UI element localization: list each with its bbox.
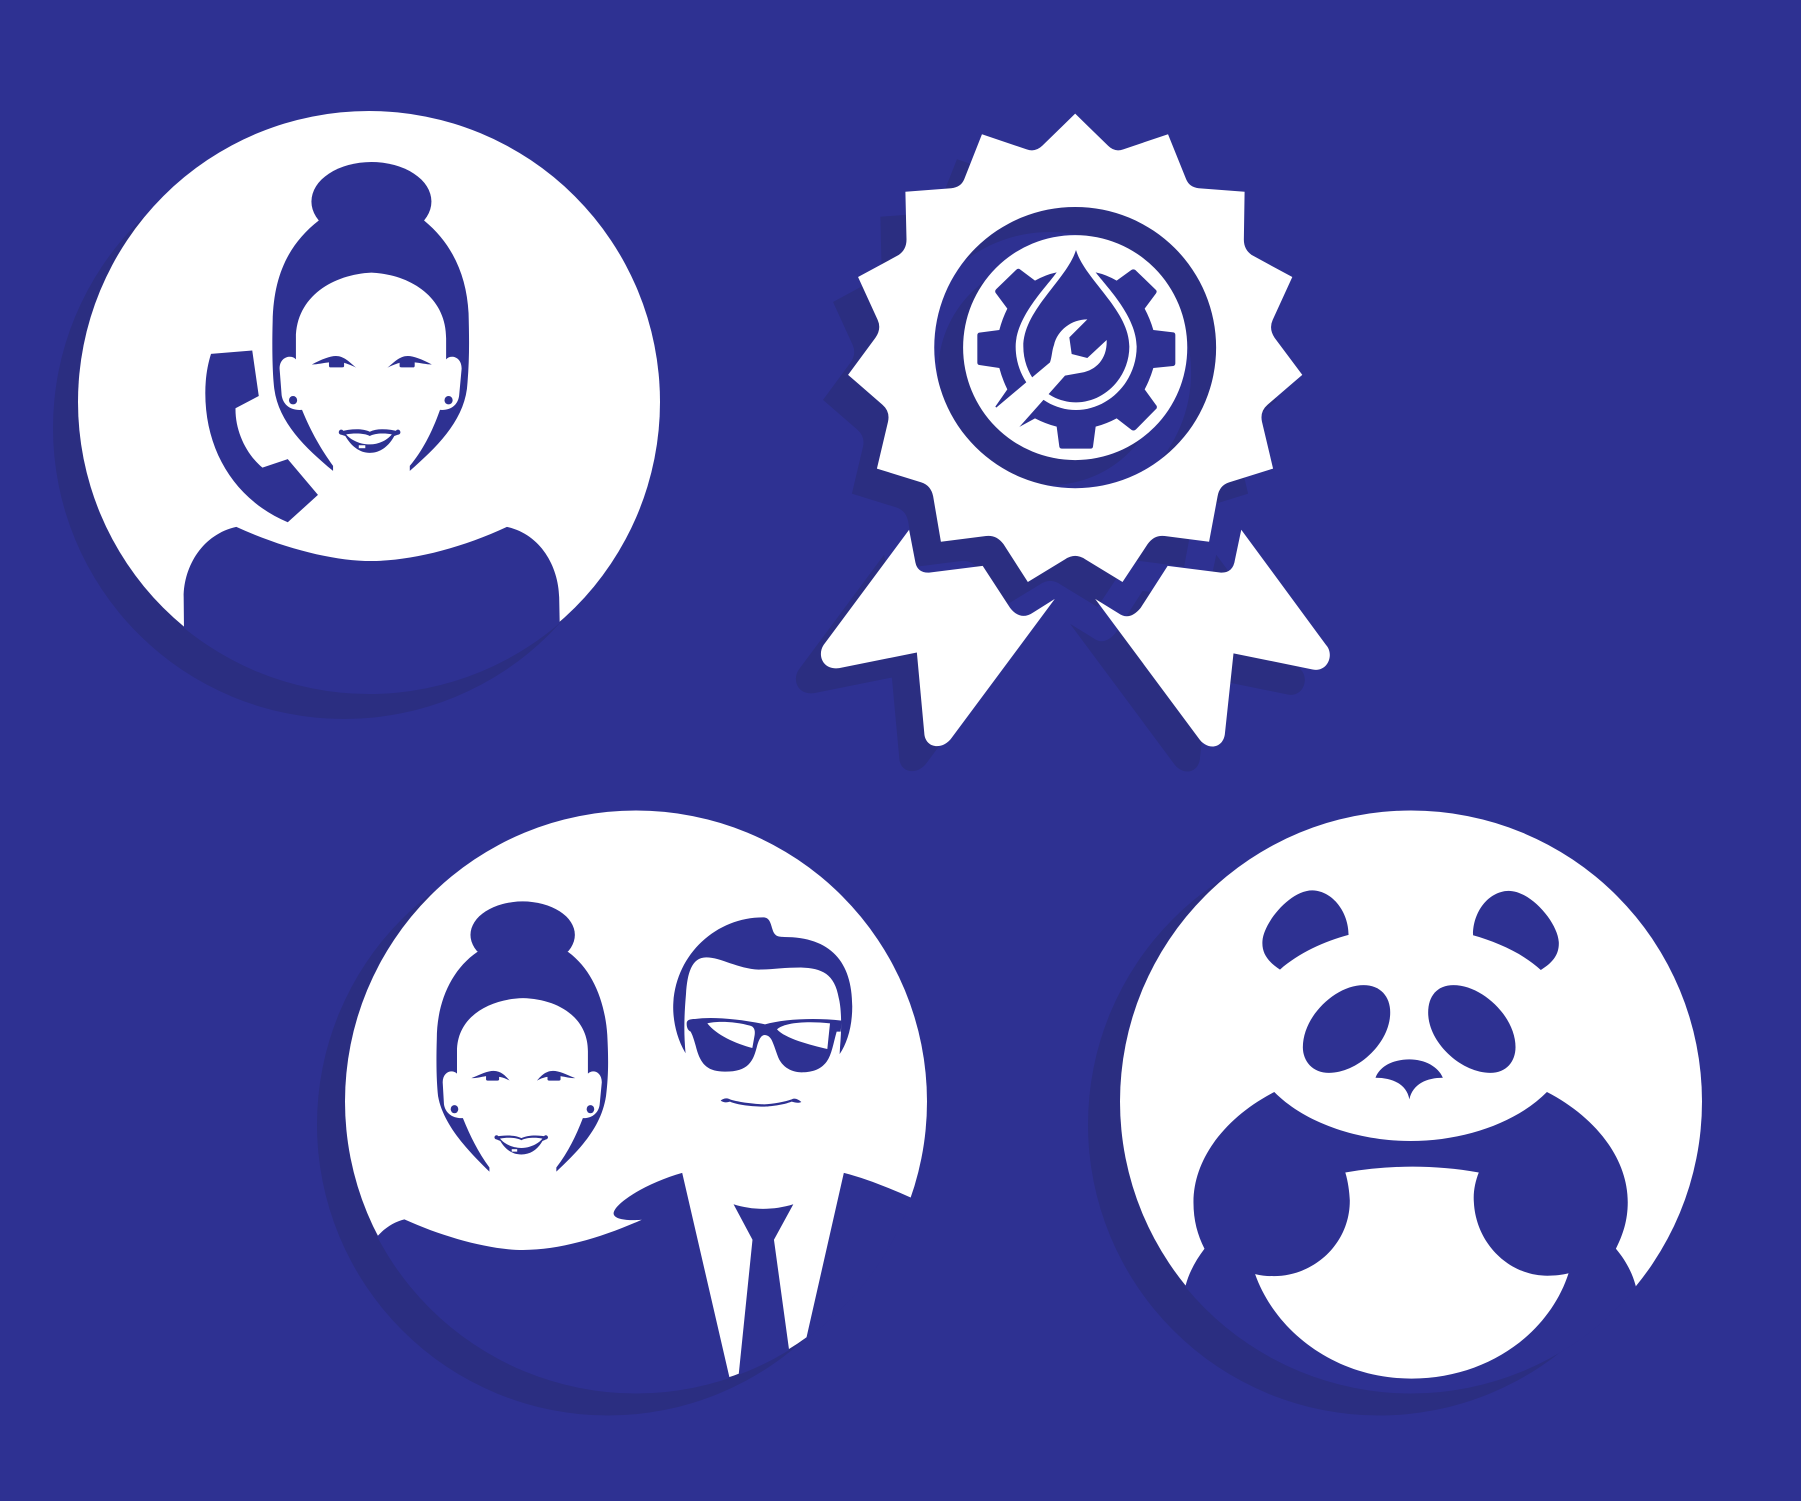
earring left — [289, 396, 297, 404]
man hair — [673, 917, 852, 1054]
starburst seal with ring — [848, 114, 1302, 582]
lens highlight left — [707, 1022, 755, 1048]
mouth — [339, 429, 400, 453]
drop outline — [1016, 247, 1137, 410]
hair — [272, 220, 469, 471]
man mouth — [721, 1098, 801, 1107]
figure: woman and man in suit — [378, 901, 911, 1394]
circle shadow — [1088, 834, 1670, 1416]
hair bun — [311, 162, 432, 220]
white circle — [345, 810, 927, 1392]
panel: woman and man — [317, 810, 927, 1416]
earring right — [587, 1105, 594, 1113]
gear — [977, 269, 1175, 449]
oil drop — [1023, 250, 1129, 402]
eye right — [387, 356, 432, 368]
ear left — [1262, 890, 1349, 970]
woman hair — [436, 952, 608, 1172]
badge shadow — [796, 139, 1305, 771]
circle shadow — [317, 834, 899, 1416]
woman eye right — [537, 1071, 575, 1081]
sunglasses — [687, 1018, 842, 1072]
eye patch right — [1428, 985, 1516, 1073]
white circle — [78, 111, 660, 693]
figure: panda — [1186, 890, 1636, 1394]
earring left — [451, 1105, 458, 1113]
ribbon right — [1095, 530, 1330, 746]
circle shadow — [53, 137, 635, 719]
woman eye left — [471, 1071, 510, 1081]
panel: woman on the phone — [53, 111, 660, 763]
figure: woman with telephone — [184, 162, 560, 694]
face — [280, 273, 462, 473]
woman face — [443, 998, 602, 1174]
ribbon left — [821, 530, 1055, 746]
nose — [1376, 1059, 1443, 1099]
body and arms — [1186, 1092, 1636, 1394]
earring right — [444, 396, 453, 404]
infographic canvas — [53, 111, 1702, 1416]
badge body — [821, 114, 1330, 746]
eye left — [312, 356, 356, 368]
white circle — [1120, 810, 1702, 1392]
belly — [1255, 1167, 1569, 1379]
hair bun — [470, 901, 575, 952]
shoulders — [184, 526, 560, 694]
lens highlight right — [777, 1022, 830, 1049]
woman mouth — [494, 1135, 548, 1154]
panel: panda — [1088, 810, 1702, 1443]
icon: telephone handset — [205, 351, 318, 522]
wrench — [995, 319, 1107, 430]
man sunglasses and mouth — [687, 1018, 842, 1107]
icon: gear, oil drop and wrench — [977, 247, 1175, 449]
ear right — [1473, 891, 1559, 970]
panel: award badge — [796, 114, 1330, 771]
eye patch left — [1303, 985, 1390, 1073]
bodies: woman's shoulders, man's suit and tie — [378, 1172, 911, 1394]
